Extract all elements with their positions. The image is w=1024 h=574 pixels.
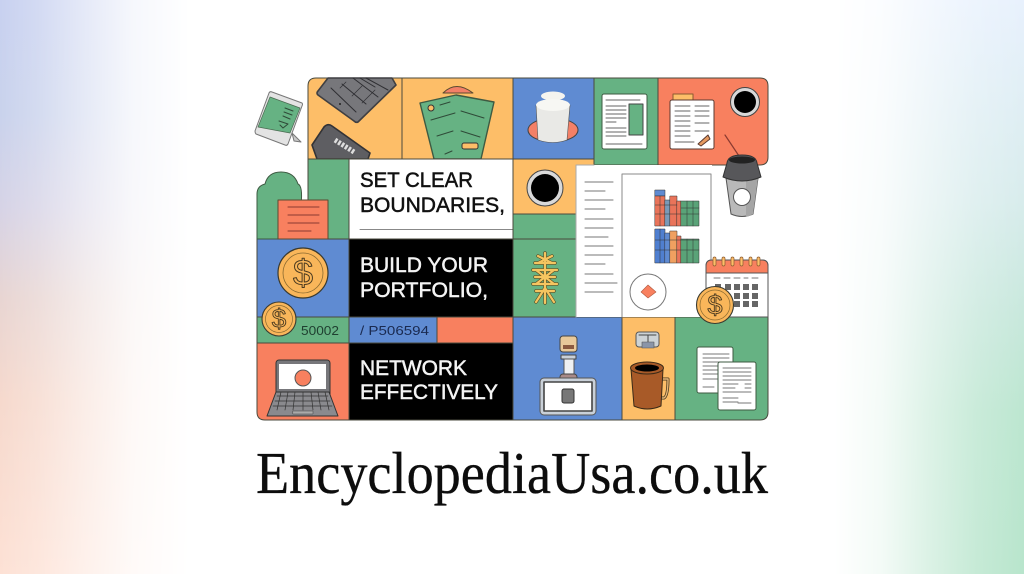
icon: small dollar coin: $ bbox=[272, 304, 287, 334]
chart: lower stacked bars bbox=[655, 229, 699, 263]
icon: green folder document bbox=[420, 86, 494, 159]
heading: build your portfolio: PORTFOLIO, bbox=[360, 279, 488, 302]
panel: build your portfolio bbox=[349, 239, 513, 317]
icon: coral memo bbox=[278, 200, 328, 239]
panel: folder tile bbox=[402, 78, 513, 159]
panel: network effectively bbox=[349, 343, 513, 420]
heading: build your portfolio bbox=[360, 254, 488, 302]
panel: set clear boundaries bbox=[349, 159, 513, 239]
panel: document tile bbox=[594, 78, 658, 165]
panel: green spacer tile bbox=[513, 214, 576, 239]
icon: card reader bbox=[312, 125, 370, 159]
icon: dollar coin on calendar: $ bbox=[707, 290, 723, 320]
icon: small machine bbox=[636, 332, 659, 348]
icon: round hole bbox=[730, 88, 760, 116]
icon: overlapping documents bbox=[697, 347, 756, 410]
icon: tilted phone on stand bbox=[255, 92, 302, 145]
panel: code strip green bbox=[257, 317, 349, 343]
panel: green side tile bbox=[308, 159, 349, 239]
panel: ornament tile bbox=[513, 239, 576, 317]
chart: upper stacked bars bbox=[655, 190, 699, 226]
heading: set clear boundaries: SET CLEAR bbox=[360, 169, 473, 192]
icon: green tree bbox=[257, 172, 302, 239]
heading: network effectively bbox=[360, 357, 498, 404]
icon: gold ornament bbox=[533, 253, 557, 303]
label: code P506594: / P506594 bbox=[360, 323, 429, 338]
panel: mosaic grid bbox=[257, 78, 768, 420]
icon: diamond badge bbox=[630, 274, 666, 310]
label: code 50002: 50002 bbox=[301, 323, 339, 338]
panel: chart sheet bbox=[576, 165, 712, 317]
panel: hole tile bbox=[513, 159, 594, 214]
icon: tablet bbox=[317, 78, 396, 122]
icon: round hole bbox=[527, 170, 563, 206]
icon: calendar bbox=[706, 257, 768, 317]
panel: laptop tile bbox=[257, 343, 349, 420]
title: site name: EncyclopediaUsa.co.uk bbox=[256, 440, 768, 506]
panel: bottom orange tile bbox=[622, 317, 675, 420]
icon: dollar coin on calendar bbox=[696, 286, 734, 324]
heading: set clear boundaries bbox=[360, 169, 505, 217]
icon: takeaway coffee cup bbox=[723, 155, 761, 217]
panel: coral strip bbox=[437, 317, 513, 343]
panel: cup tile bbox=[513, 78, 594, 159]
icon: brown mug bbox=[630, 362, 668, 409]
heading: set clear boundaries: BOUNDARIES, bbox=[360, 194, 505, 217]
icon: large dollar coin: $ bbox=[293, 252, 313, 293]
panel: notes tile bbox=[658, 78, 768, 165]
heading: network effectively: NETWORK bbox=[360, 357, 467, 380]
panel: coin tile bbox=[257, 239, 349, 317]
panel: tablet tile bbox=[308, 78, 402, 159]
icon: small dollar coin bbox=[262, 302, 296, 336]
icon: notepad bbox=[670, 94, 714, 149]
heading: build your portfolio: BUILD YOUR bbox=[360, 254, 488, 277]
heading: network effectively: EFFECTIVELY bbox=[360, 381, 498, 404]
panel: bottom blue tile bbox=[513, 317, 622, 420]
panel: code strip blue bbox=[349, 317, 437, 343]
icon: document sheet bbox=[602, 94, 647, 149]
icon: white jar on plate bbox=[528, 92, 578, 142]
panel: bottom green tile bbox=[675, 317, 768, 420]
icon: laptop bbox=[267, 360, 338, 416]
icon: id badge with lanyard bbox=[540, 336, 596, 415]
